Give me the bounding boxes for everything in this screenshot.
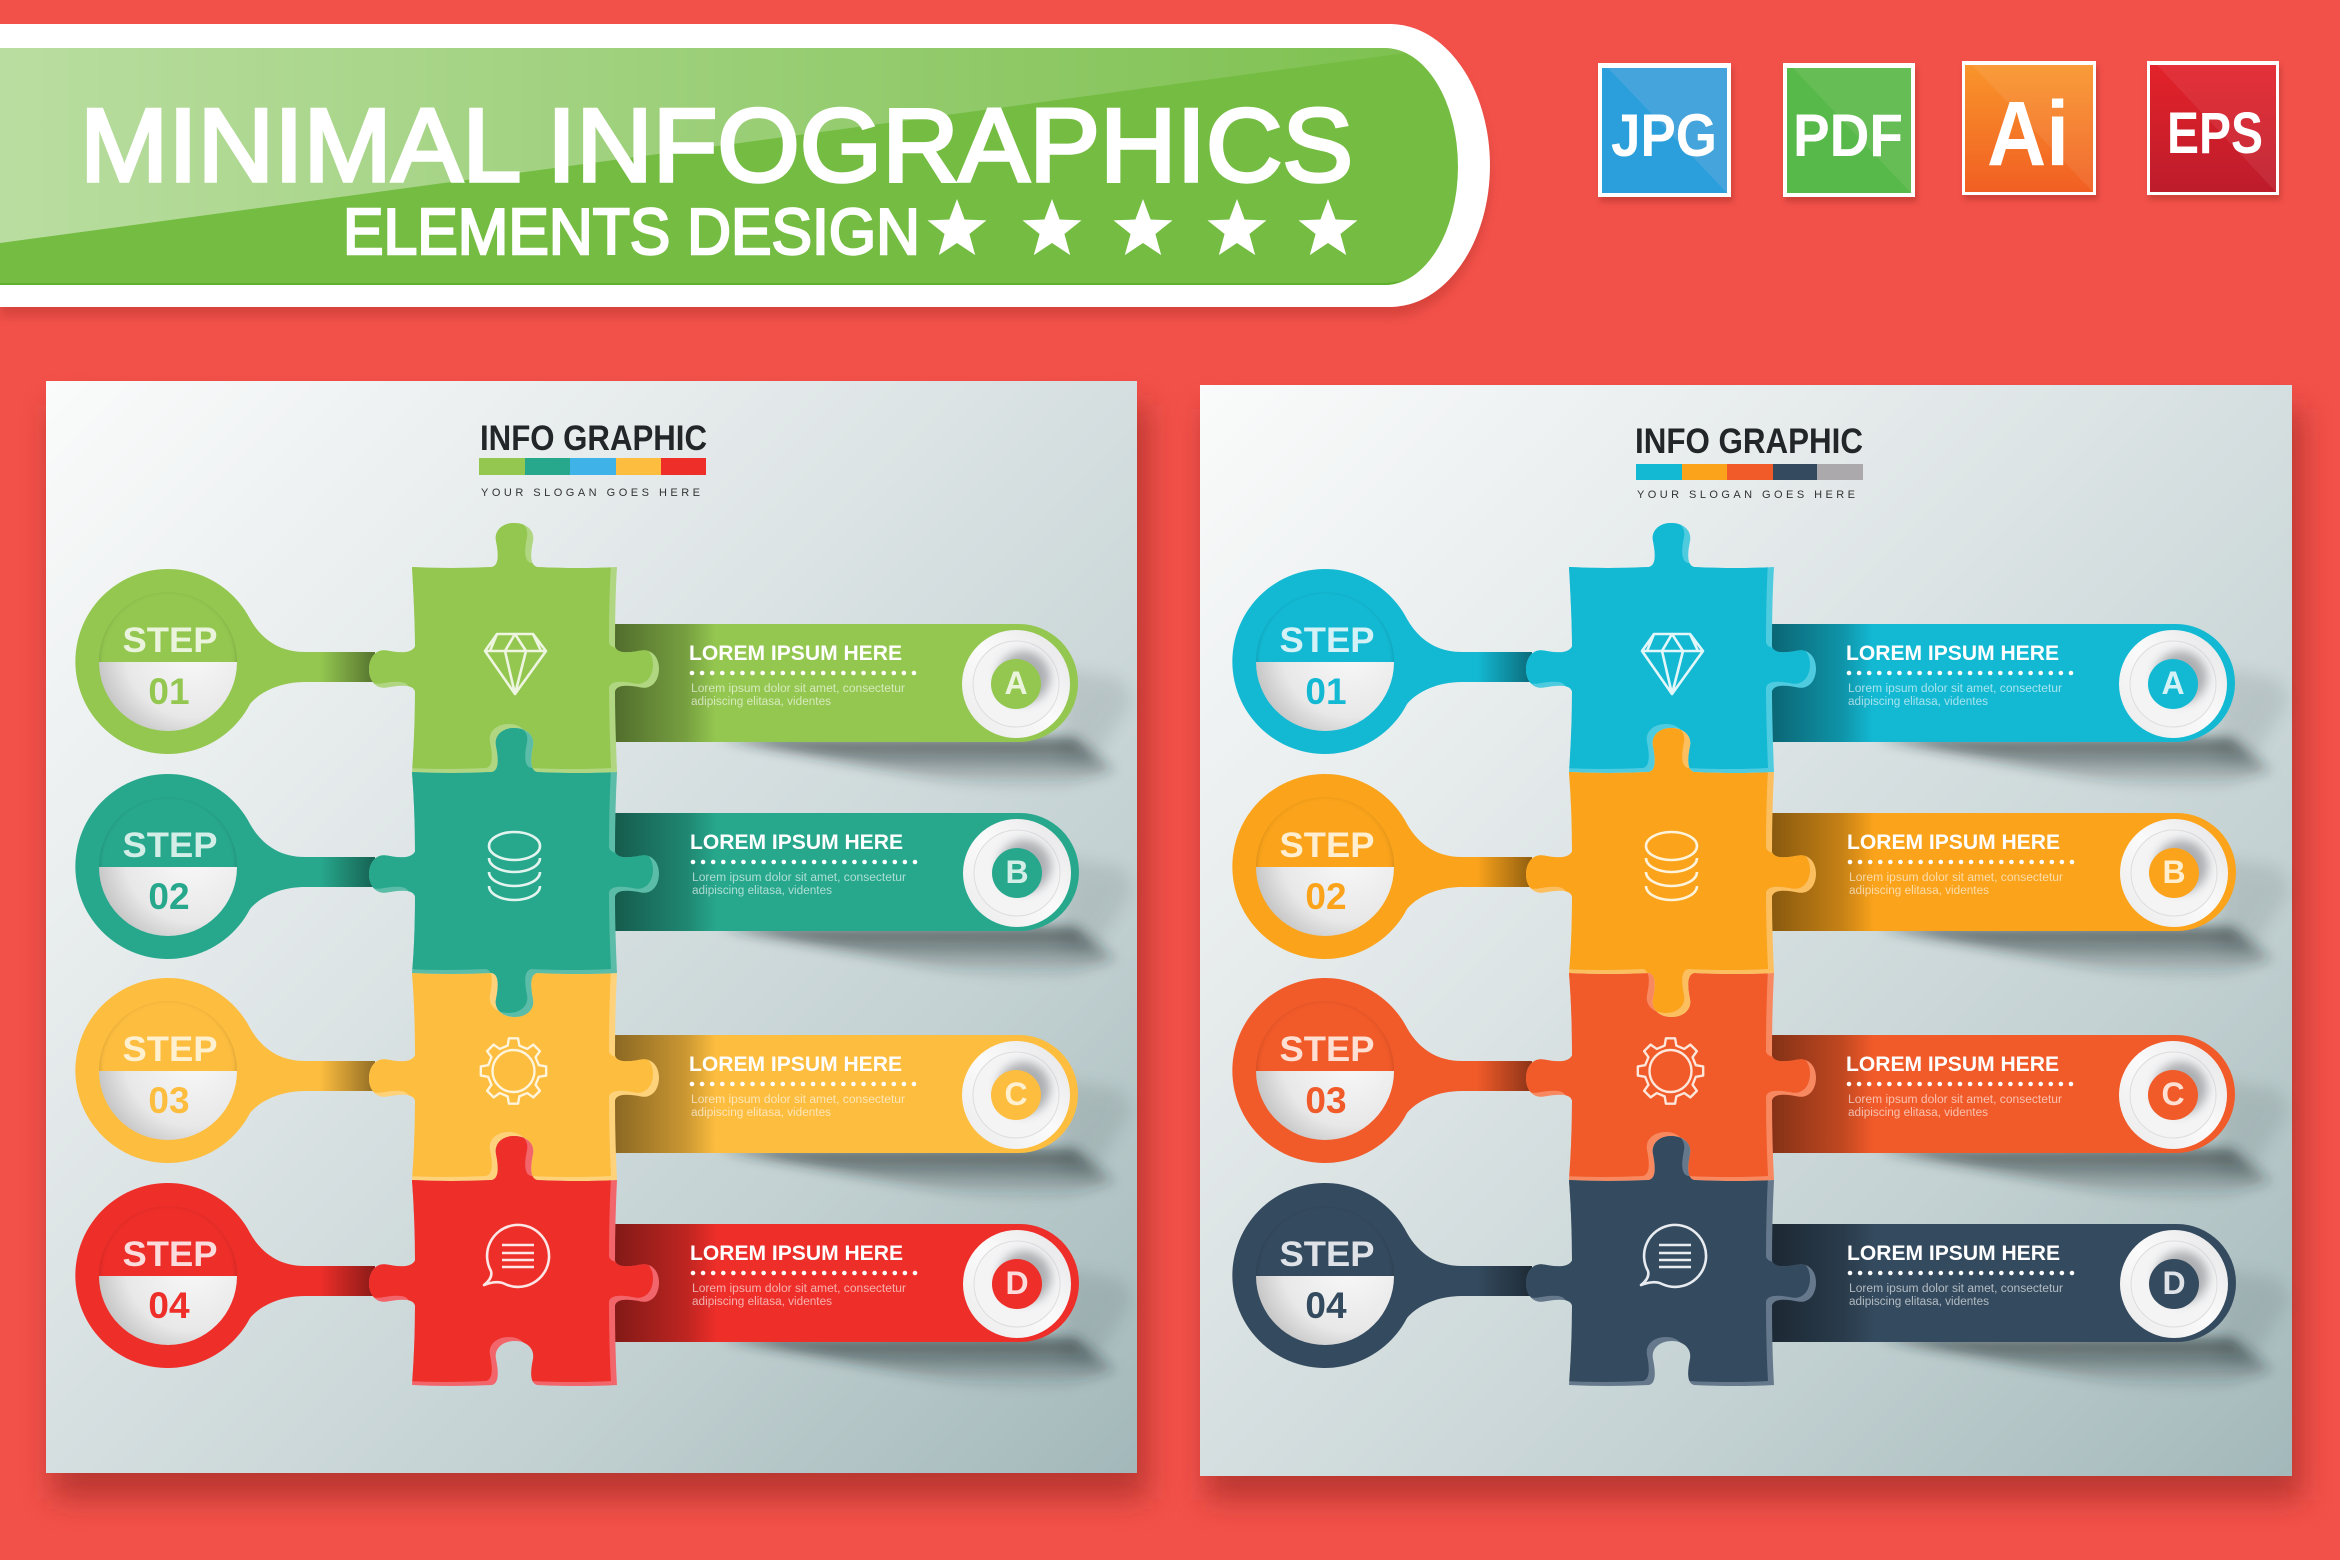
banner white outline	[0, 24, 1490, 307]
step 03 number: 03	[1305, 1080, 1347, 1121]
step 03 label: STEP	[1280, 1030, 1374, 1069]
step 04 label: STEP	[122, 1235, 218, 1274]
bar C body text: adipiscing elitasa, videntes	[1848, 1107, 1988, 1119]
left panel color strip	[479, 458, 706, 475]
icon: diamond	[485, 634, 546, 694]
step 01 number: 01	[148, 671, 190, 712]
badge letter A: A	[2161, 665, 2185, 701]
option bar B	[601, 813, 1133, 984]
option bar D	[601, 1224, 1133, 1395]
icon: EPS file badge	[2147, 61, 2281, 200]
right panel background	[1200, 385, 2292, 1476]
badge letter D: D	[2162, 1265, 2186, 1301]
option bar C	[600, 1035, 1132, 1206]
panel: left infographic	[46, 381, 1148, 1499]
bar A body text: Lorem ipsum dolor sit amet, consectetur	[1848, 683, 2062, 695]
step 02 number: 02	[1305, 876, 1347, 917]
left panel logo title: INFO GRAPHIC	[480, 419, 707, 458]
icon: EPS file badge: EPS	[2167, 101, 2263, 166]
badge letter D: D	[1005, 1265, 1029, 1301]
puzzle piece 1	[363, 519, 659, 773]
puzzle piece 4	[363, 1132, 659, 1386]
icon: gear	[481, 1038, 546, 1104]
banner subtitle: ELEMENTS DESIGN	[343, 195, 920, 268]
puzzle piece 3	[363, 969, 659, 1181]
bar C heading: LOREM IPSUM HERE	[689, 1053, 902, 1076]
bar A body text: adipiscing elitasa, videntes	[1848, 696, 1988, 708]
icon: JPG file badge: JPG	[1611, 102, 1717, 169]
bar A heading: LOREM IPSUM HERE	[689, 642, 902, 665]
step 02 number: 02	[148, 876, 190, 917]
icon: PDF file badge: PDF	[1793, 102, 1903, 169]
option bar C	[1757, 1035, 2289, 1206]
step 02 label: STEP	[1280, 826, 1374, 865]
badge letter B: B	[1005, 854, 1029, 890]
bar C body text: Lorem ipsum dolor sit amet, consectetur	[691, 1094, 905, 1106]
icon: coin stack	[489, 832, 540, 900]
right panel color strip	[1636, 464, 1863, 480]
step 01 label: STEP	[122, 621, 218, 660]
icon: diamond	[1642, 634, 1703, 694]
puzzle piece 3	[1520, 969, 1816, 1181]
bar D body text: adipiscing elitasa, videntes	[692, 1296, 832, 1308]
step 04 number: 04	[148, 1285, 190, 1326]
step 04 badge	[1232, 1183, 1532, 1368]
step 02 badge	[75, 774, 375, 959]
step 04 number: 04	[1305, 1285, 1347, 1326]
puzzle piece 4	[1520, 1132, 1816, 1386]
puzzle piece 2	[363, 724, 659, 1017]
left panel background	[46, 381, 1137, 1473]
step 02 label: STEP	[122, 826, 218, 865]
option bar B	[1758, 813, 2290, 984]
icon: chat bubble	[484, 1225, 549, 1287]
banner green fill	[0, 48, 1458, 285]
option bar A	[1757, 624, 2289, 795]
step 01 number: 01	[1305, 671, 1347, 712]
icon: coin stack	[1646, 832, 1697, 900]
step 03 number: 03	[148, 1080, 190, 1121]
step 02 badge	[1232, 774, 1532, 959]
panel: right infographic	[1200, 385, 2302, 1500]
bar B body text: Lorem ipsum dolor sit amet, consectetur	[1849, 872, 2063, 884]
right panel slogan: YOUR SLOGAN GOES HERE	[1637, 489, 1855, 501]
step 01 label: STEP	[1280, 621, 1374, 660]
step 03 badge	[1232, 978, 1532, 1163]
step 03 label: STEP	[122, 1030, 218, 1069]
bar C body text: adipiscing elitasa, videntes	[691, 1107, 831, 1119]
bar D heading: LOREM IPSUM HERE	[690, 1242, 903, 1265]
badge letter B: B	[2162, 854, 2186, 890]
icon: JPG file badge	[1598, 63, 1733, 202]
step 04 badge	[75, 1183, 375, 1368]
bar D heading: LOREM IPSUM HERE	[1847, 1242, 2060, 1265]
badge letter C: C	[2161, 1076, 2185, 1112]
bar D body text: Lorem ipsum dolor sit amet, consectetur	[692, 1283, 906, 1295]
bar D body text: Lorem ipsum dolor sit amet, consectetur	[1849, 1283, 2063, 1295]
bar D body text: adipiscing elitasa, videntes	[1849, 1296, 1989, 1308]
bar B body text: Lorem ipsum dolor sit amet, consectetur	[692, 872, 906, 884]
bar A heading: LOREM IPSUM HERE	[1846, 642, 2059, 665]
bar A body text: Lorem ipsum dolor sit amet, consectetur	[691, 683, 905, 695]
icon: PDF file badge	[1783, 63, 1917, 202]
bar A body text: adipiscing elitasa, videntes	[691, 696, 831, 708]
option bar A	[600, 624, 1132, 795]
puzzle piece 1	[1520, 519, 1816, 773]
badge letter C: C	[1004, 1076, 1028, 1112]
header banner	[0, 24, 1490, 317]
icon: chat bubble	[1641, 1225, 1706, 1287]
step 03 badge	[75, 978, 375, 1163]
puzzle piece 2	[1520, 724, 1816, 1017]
banner title: MINIMAL INFOGRAPHICS	[80, 88, 1353, 204]
left panel slogan: YOUR SLOGAN GOES HERE	[481, 487, 700, 499]
bar C heading: LOREM IPSUM HERE	[1846, 1053, 2059, 1076]
rating stars	[928, 199, 1358, 255]
option bar D	[1758, 1224, 2290, 1395]
step 01 badge	[75, 569, 375, 754]
bar C body text: Lorem ipsum dolor sit amet, consectetur	[1848, 1094, 2062, 1106]
bar B body text: adipiscing elitasa, videntes	[692, 885, 832, 897]
step 04 label: STEP	[1280, 1235, 1374, 1274]
bar B heading: LOREM IPSUM HERE	[690, 831, 903, 854]
icon: Ai file badge	[1962, 61, 2098, 200]
icon: gear	[1638, 1038, 1703, 1104]
icon: Ai file badge: Ai	[1987, 83, 2069, 185]
bar B body text: adipiscing elitasa, videntes	[1849, 885, 1989, 897]
bar B heading: LOREM IPSUM HERE	[1847, 831, 2060, 854]
step 01 badge	[1232, 569, 1532, 754]
badge letter A: A	[1004, 665, 1028, 701]
right panel logo title: INFO GRAPHIC	[1635, 422, 1863, 461]
